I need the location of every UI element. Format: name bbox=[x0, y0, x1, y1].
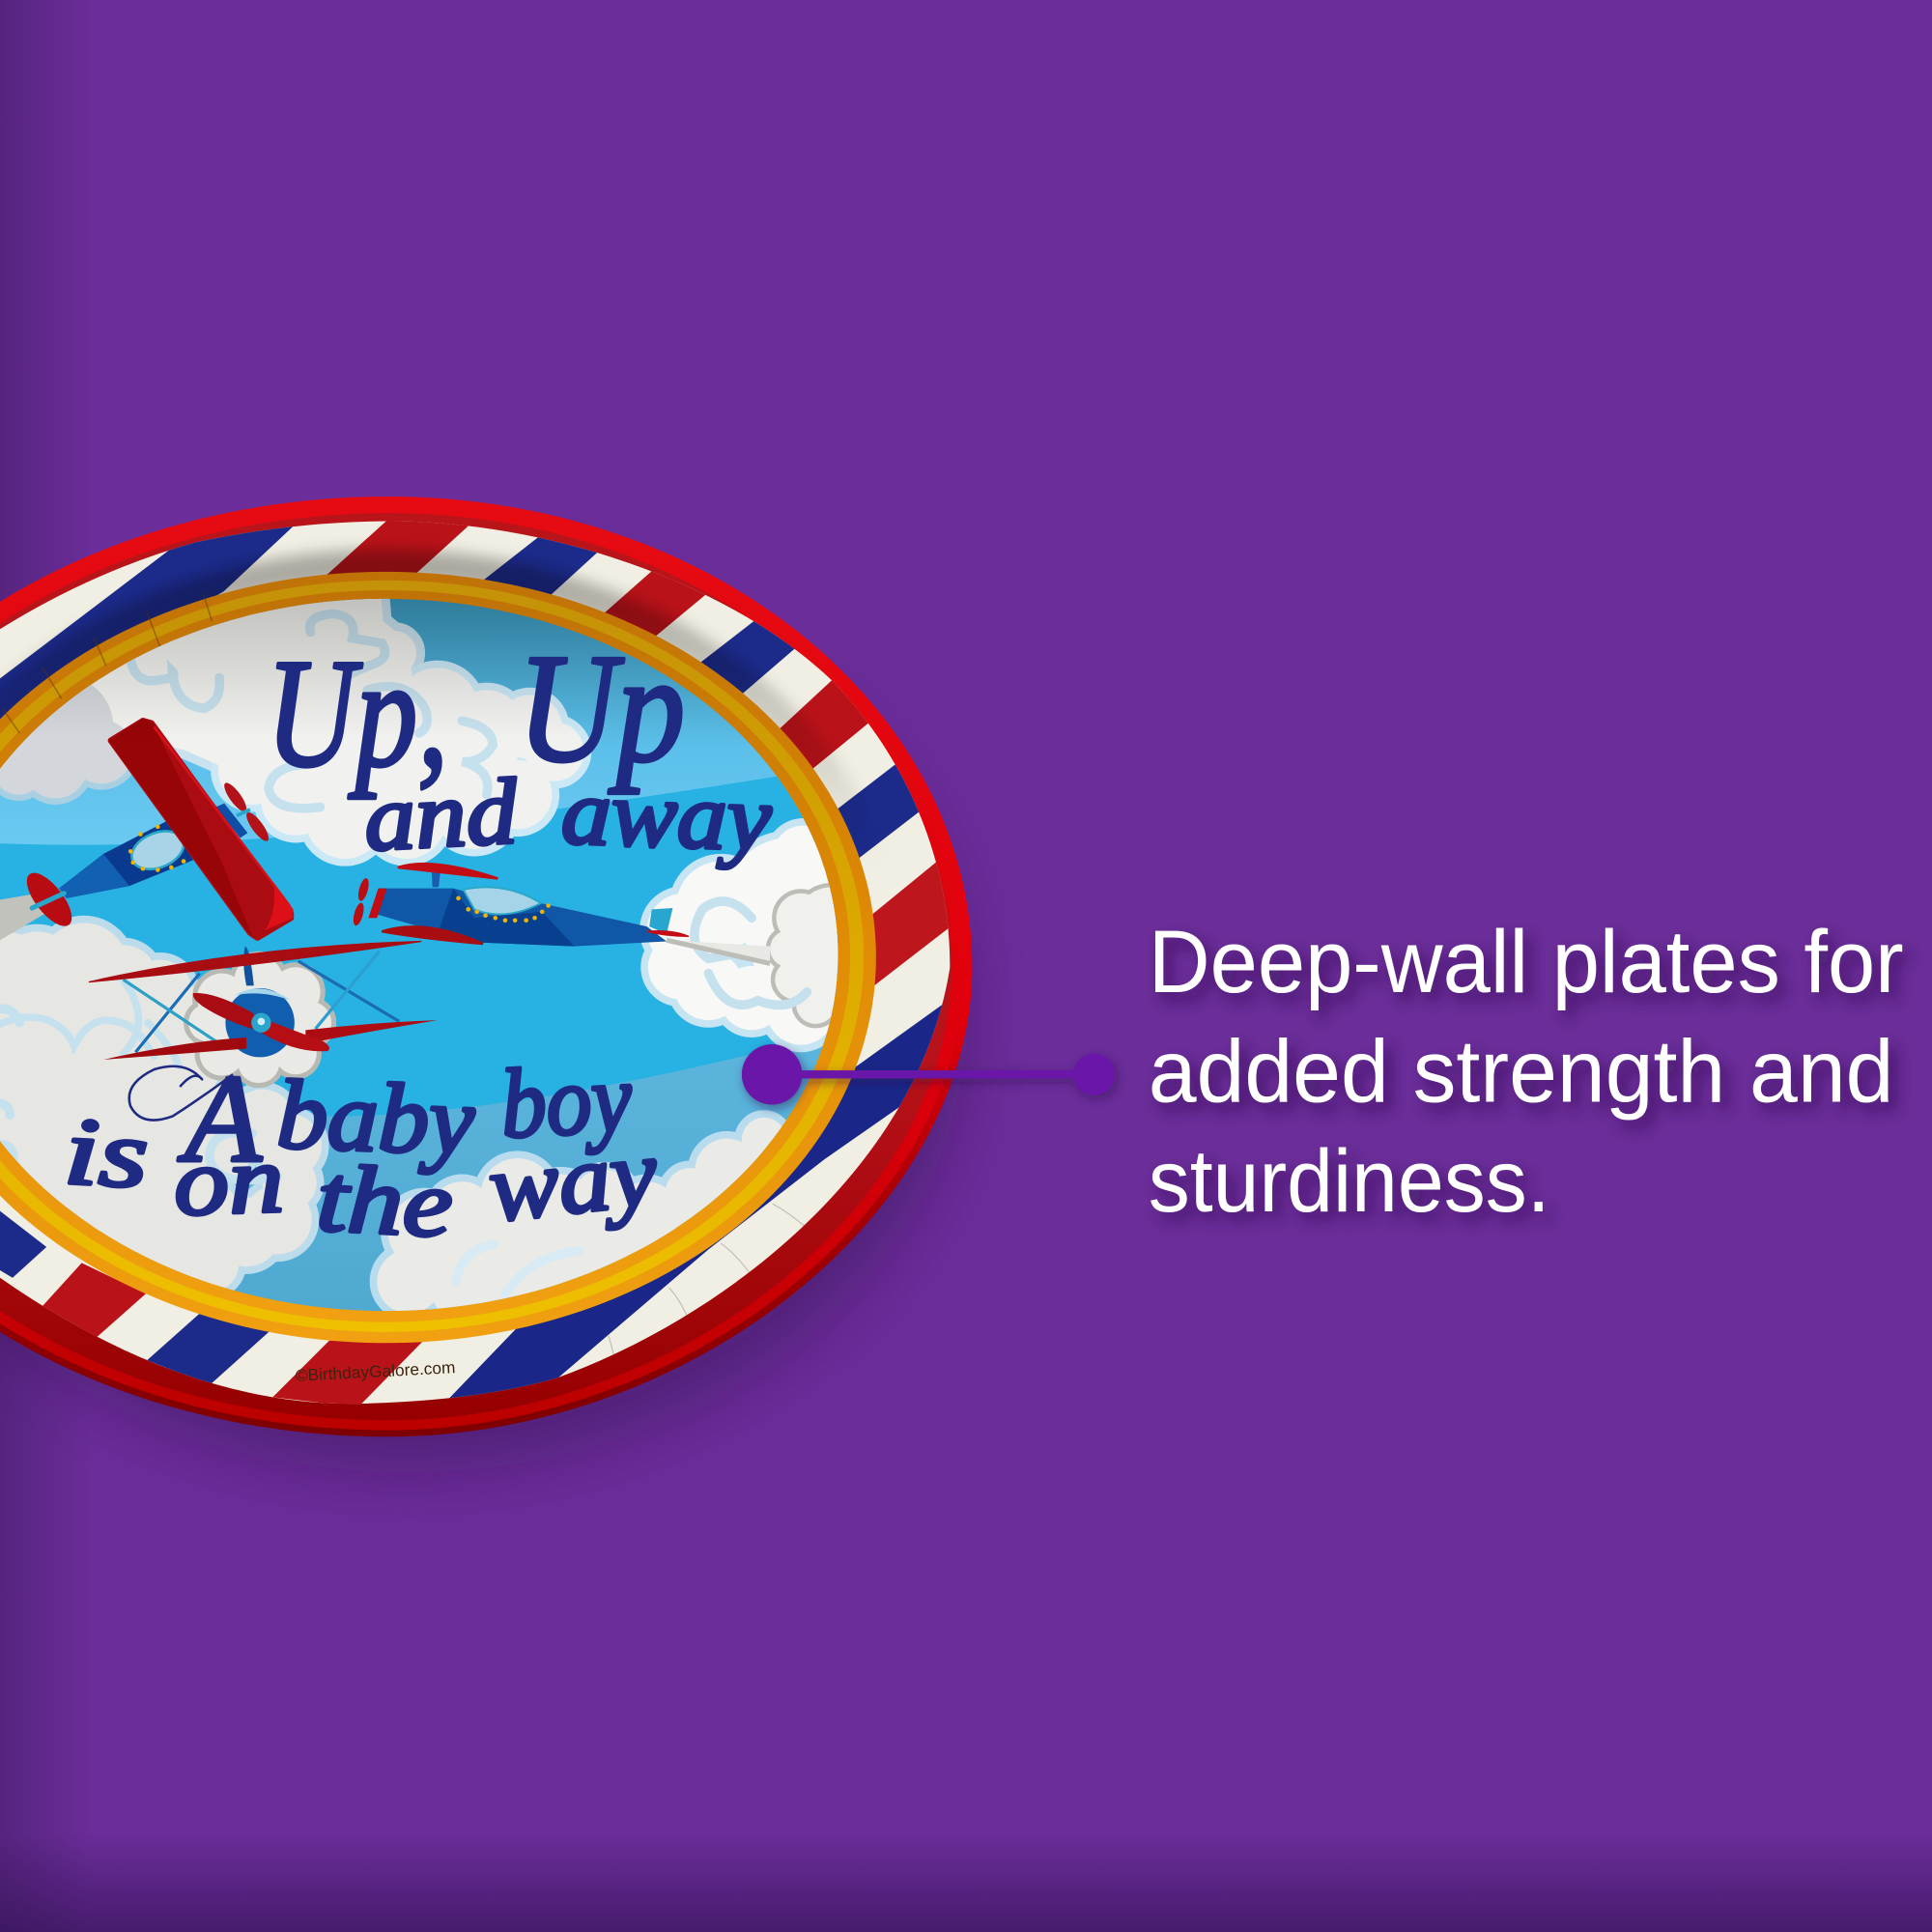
paper plate bbox=[0, 496, 985, 1436]
plate lettering bbox=[62, 622, 774, 1258]
plate drop shadow bbox=[0, 560, 967, 1472]
text: A baby boy: baby bbox=[275, 1061, 477, 1177]
text: Up, Up bbox=[267, 622, 685, 799]
callout text: added strength and bbox=[1149, 1022, 1893, 1121]
text: and away: and bbox=[361, 759, 520, 870]
soft top shading of the plate bbox=[57, 599, 715, 715]
text: and away bbox=[361, 759, 774, 870]
yellow and orange ring bbox=[0, 572, 876, 1343]
text: is on the way: the bbox=[314, 1144, 455, 1258]
icon: side-view biplane bbox=[352, 864, 689, 947]
callout connector bbox=[742, 1044, 1115, 1104]
copyright line: ©BirthdayGalore.com bbox=[295, 1357, 456, 1385]
text: A baby boy: A bbox=[177, 1050, 262, 1189]
text: is on the way: way bbox=[484, 1118, 663, 1242]
plane smoke trails bbox=[0, 894, 770, 963]
plate outer red rim bbox=[0, 497, 972, 1436]
clouds bbox=[0, 599, 838, 1312]
text: is on the way bbox=[62, 1097, 663, 1258]
text: Up, Up: Up bbox=[518, 622, 685, 794]
callout text bbox=[1149, 913, 1904, 1231]
text: A baby boy: boy bbox=[498, 1043, 635, 1159]
callout text: sturdiness. bbox=[1149, 1132, 1550, 1231]
text: is on the way: is bbox=[62, 1097, 151, 1208]
striped border band bbox=[0, 496, 985, 1417]
text: is on the way: on bbox=[172, 1125, 285, 1236]
sky and clouds artwork bbox=[0, 599, 838, 1312]
sky gradient bands bbox=[0, 591, 850, 1331]
text: A baby boy bbox=[129, 1043, 635, 1189]
icon: diagonal red-wing plane bbox=[19, 719, 294, 938]
callout text: Deep-wall plates for bbox=[1149, 913, 1904, 1011]
text: Up, Up: Up, bbox=[267, 627, 448, 799]
icon: front-view biplane bbox=[89, 941, 438, 1083]
text: and away: away bbox=[560, 760, 774, 870]
